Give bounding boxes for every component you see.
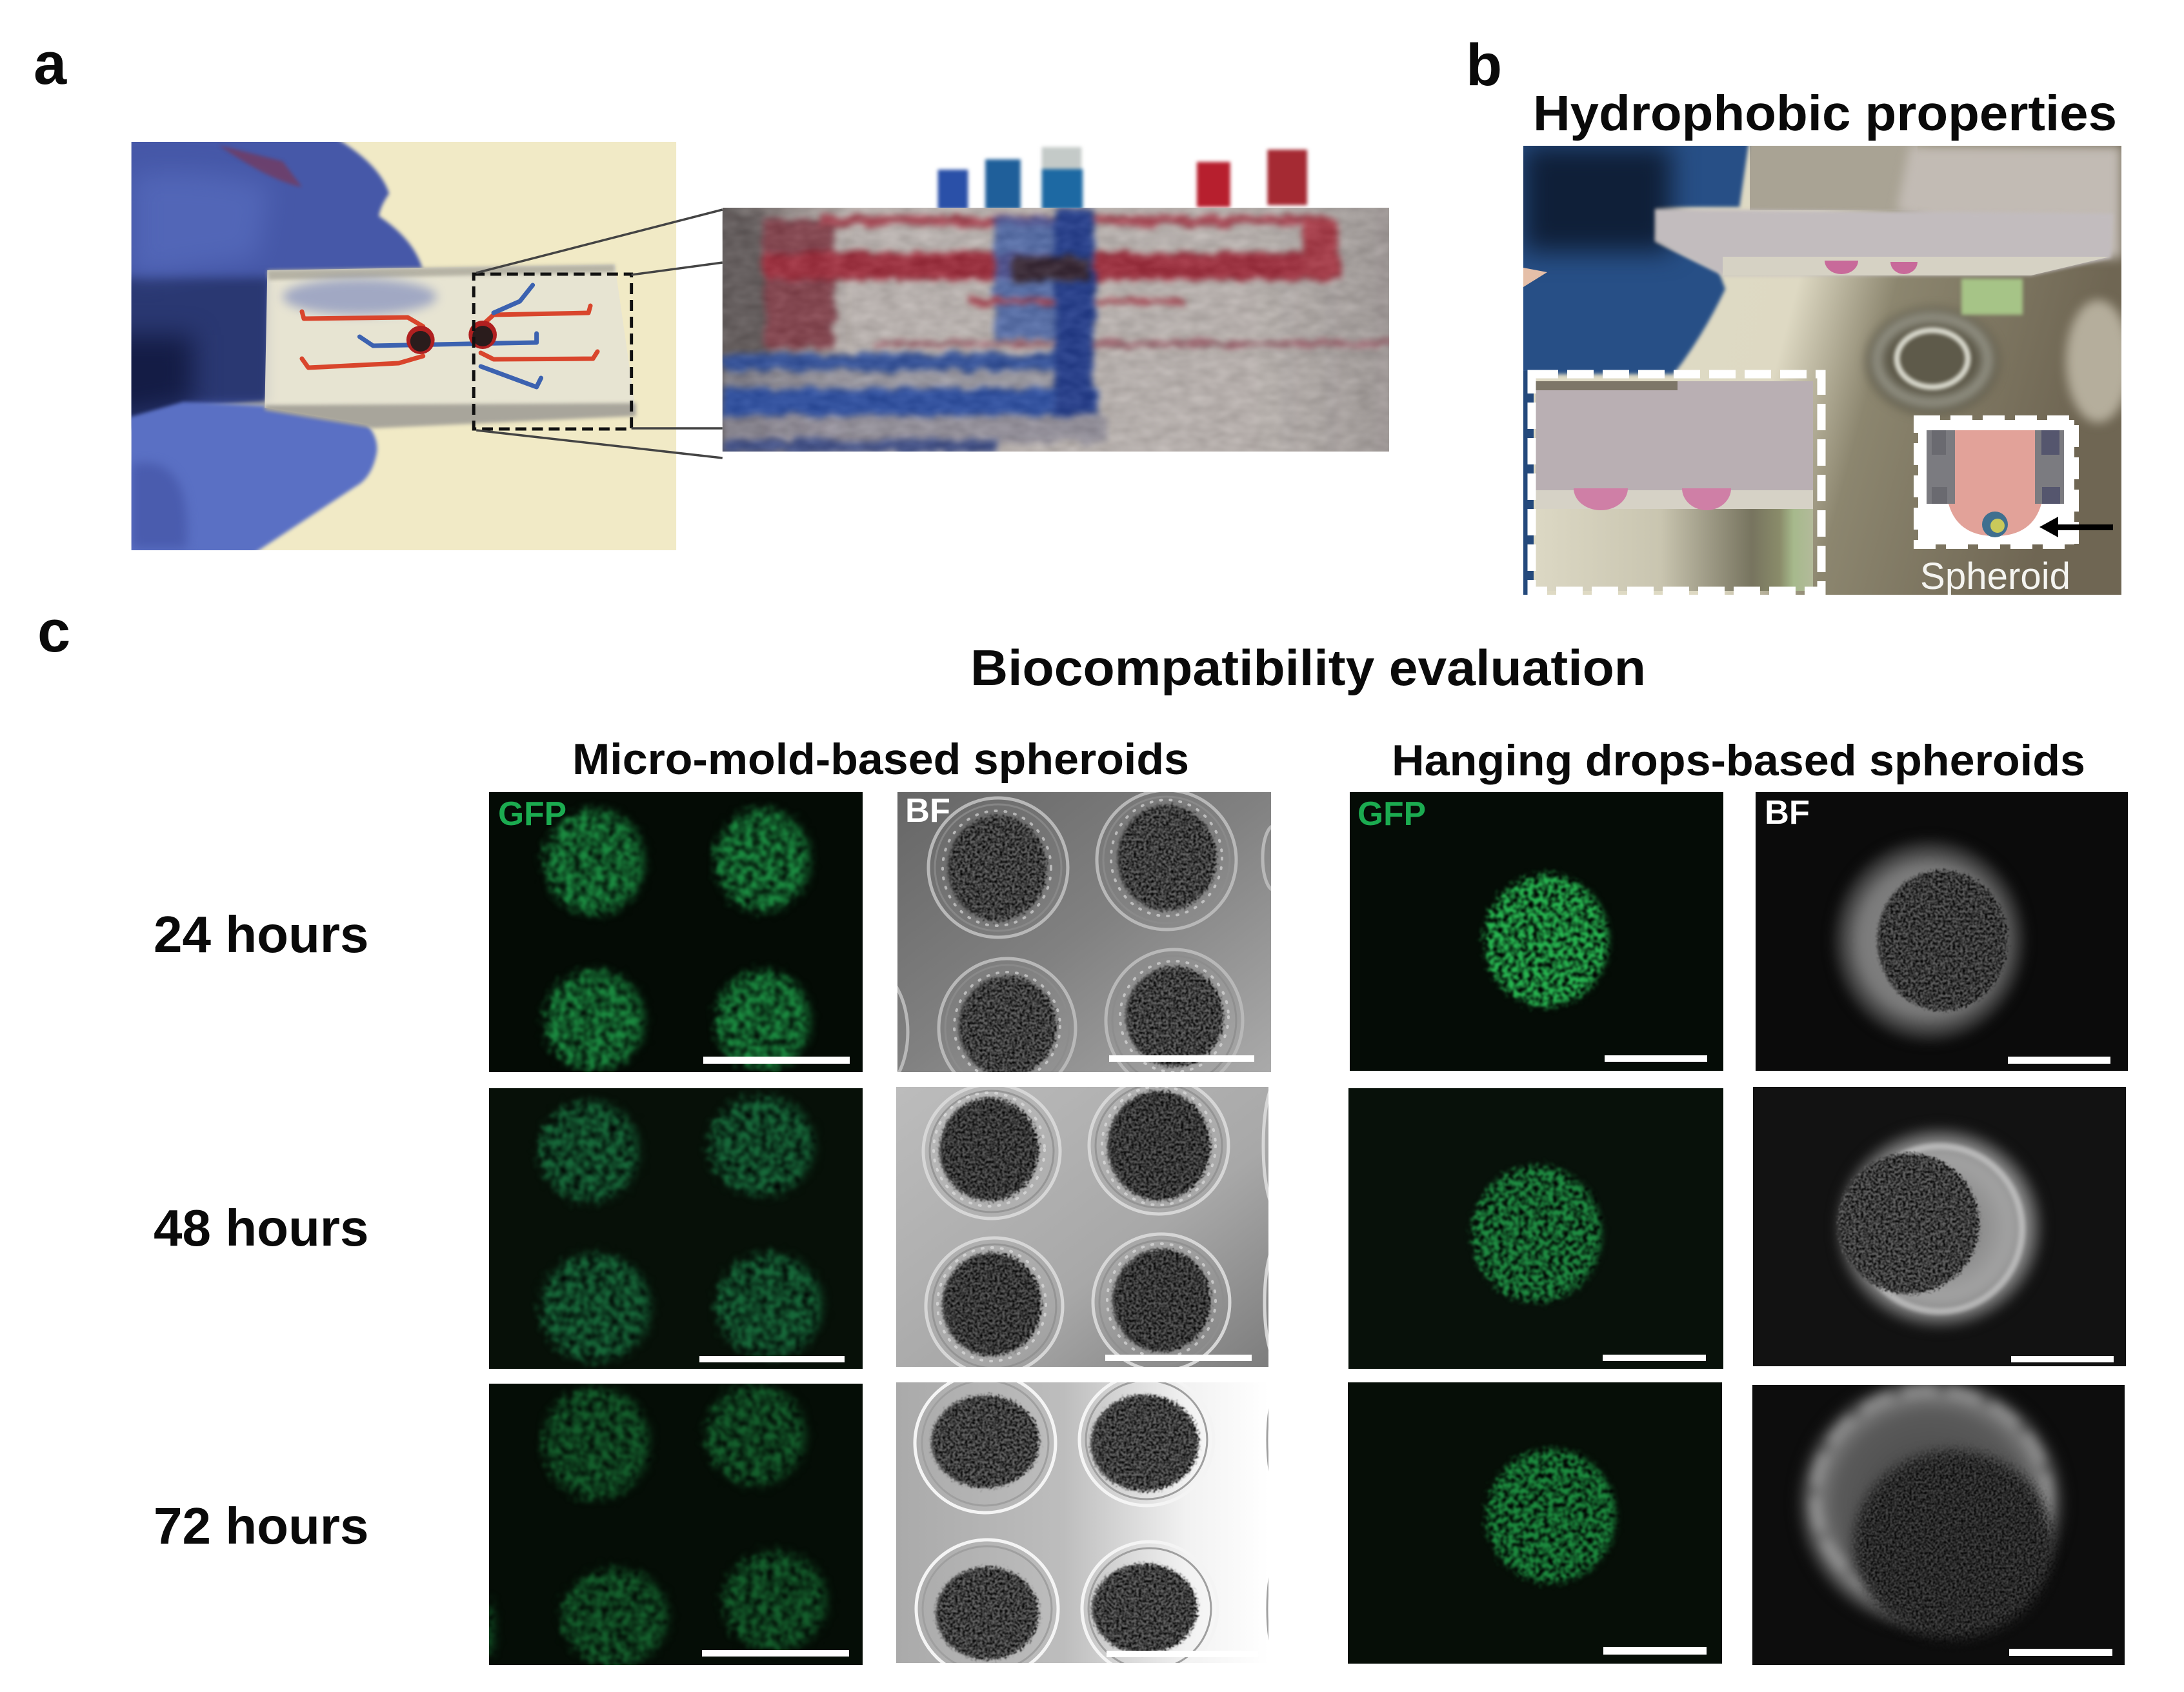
row label: 24 hours: 24 hours	[154, 906, 368, 963]
panel label a: a	[34, 31, 67, 97]
inset: hanging drop schematic	[1918, 420, 2074, 544]
row label: 72 hours: 72 hours	[154, 1497, 368, 1555]
heading: Hydrophobic properties: Hydrophobic properties	[1533, 86, 2117, 141]
micrograph: hanging drop BF 24 h	[1756, 792, 2128, 1071]
scale bar	[1109, 1055, 1254, 1062]
column heading: Hanging drops-based spheroids: Hanging drops-based spheroids	[1392, 736, 2085, 785]
scale bar	[1603, 1647, 1707, 1655]
micrograph: micro-mold BF 72 h	[896, 1373, 1303, 1678]
micrograph: hanging drop BF 72 h	[1752, 1374, 2125, 1665]
heading: Biocompatibility evaluation: Biocompatibility evaluation	[970, 639, 1646, 696]
scale bar	[2008, 1057, 2110, 1064]
panel label c: c	[37, 599, 70, 664]
scale bar	[702, 1650, 849, 1657]
inset: magnified droplets	[1532, 374, 1821, 591]
micrograph: micro-mold GFP 72 h	[483, 1384, 863, 1666]
micrograph: micro-mold GFP 24 h	[489, 792, 863, 1072]
label: Spheroid: Spheroid	[1920, 555, 2070, 597]
panel label b: b	[1466, 32, 1502, 98]
scale bar	[703, 1057, 850, 1064]
chip	[265, 264, 636, 426]
panel a: chip photo and magnification	[97, 132, 1389, 555]
column heading: Micro-mold-based spheroids: Micro-mold-based spheroids	[572, 735, 1189, 784]
scale bar	[1605, 1055, 1707, 1062]
scale bar	[1105, 1355, 1252, 1361]
micrograph: hanging drop GFP 48 h	[1348, 1088, 1723, 1369]
dashed selection box	[474, 274, 632, 429]
micrograph: hanging drop GFP 72 h	[1348, 1382, 1722, 1664]
droplets	[1825, 261, 1918, 274]
micrograph: hanging drop BF 48 h	[1753, 1087, 2126, 1366]
label: GFP: GFP	[498, 795, 566, 833]
micrograph: micro-mold GFP 48 h	[489, 1088, 863, 1369]
chip side view	[1655, 209, 2113, 275]
magnified channel view	[723, 208, 1389, 453]
photo: gloved fingers holding microfluidic chip	[97, 132, 676, 555]
tubes	[938, 147, 1307, 210]
scale bar	[1603, 1355, 1706, 1361]
label: GFP: GFP	[1357, 795, 1426, 833]
micrograph: micro-mold BF 24 h	[828, 790, 1286, 1098]
micrograph: micro-mold BF 48 h	[896, 1077, 1292, 1375]
panel b: hydrophobic photo with insets	[1510, 135, 2130, 597]
magnification lines	[476, 210, 723, 458]
row label: 48 hours: 48 hours	[154, 1199, 368, 1257]
arrow to spheroid	[2039, 517, 2113, 537]
label: BF: BF	[905, 792, 950, 830]
microchannels	[302, 285, 597, 387]
micrograph: hanging drop GFP 24 h	[1350, 792, 1723, 1071]
scale bar	[1107, 1651, 1258, 1657]
label: BF: BF	[1765, 794, 1810, 831]
scale bar	[2009, 1649, 2112, 1656]
scale bar	[699, 1356, 845, 1362]
scale bar	[2011, 1356, 2114, 1362]
